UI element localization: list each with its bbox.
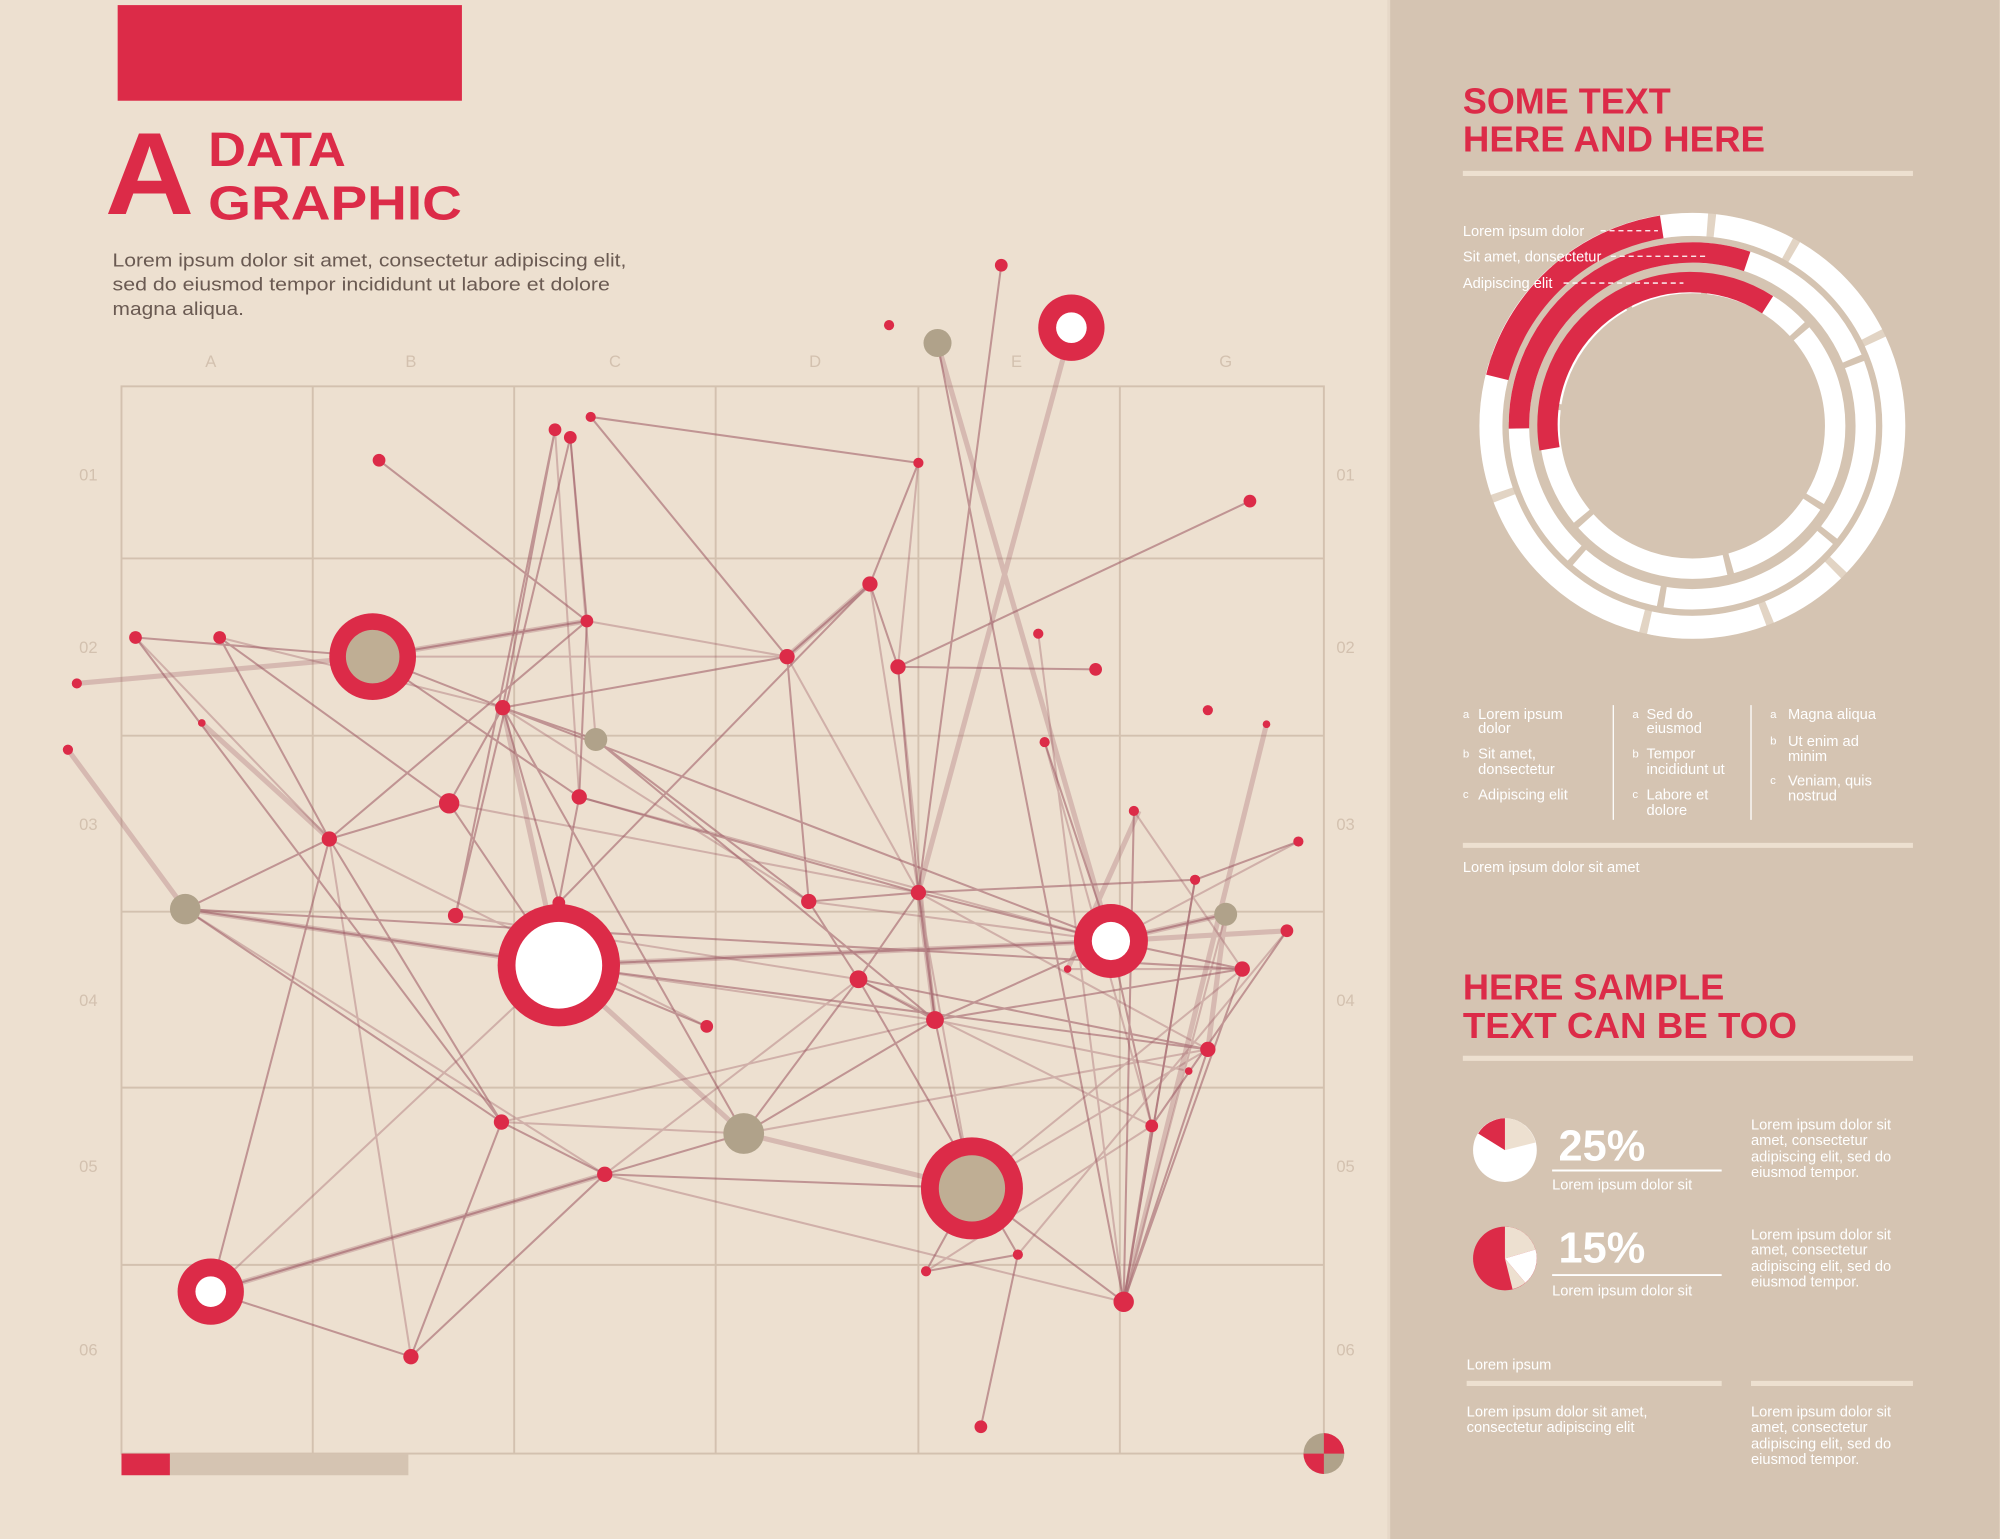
panel: right sidebar: Lorem ipsum dolor sit amet [1463, 860, 1640, 876]
footer notes: Lorem ipsum dolor sit [1751, 1405, 1891, 1421]
footer notes: amet, consectetur [1751, 1420, 1868, 1436]
heading: some text: SOME TEXT [1463, 81, 1671, 121]
legend columns: b [1463, 748, 1469, 760]
heading: sample text: HERE SAMPLE [1463, 968, 1724, 1008]
grid labels: 04 [79, 991, 98, 1010]
legend columns: a [1632, 709, 1639, 721]
legend columns: c [1632, 789, 1638, 801]
legend columns: Tempor [1646, 747, 1695, 763]
grid labels: 03 [79, 815, 98, 834]
grid labels: D [809, 352, 821, 371]
panel: right sidebar [1388, 0, 2000, 1539]
stat 15% [1552, 1224, 1722, 1299]
legend columns: Adipiscing elit [1478, 787, 1568, 803]
grid labels: 01 [79, 466, 98, 485]
donut labels: Lorem ipsum dolor [1463, 224, 1584, 240]
panel: right sidebar: adipiscing elit, sed do [1751, 1150, 1891, 1166]
grid labels: 06 [1336, 1340, 1355, 1359]
grid labels: 02 [1336, 638, 1355, 657]
stat 25% [1552, 1122, 1722, 1194]
heading: sample text: TEXT CAN BE TOO [1463, 1006, 1797, 1046]
grid labels: 05 [1336, 1157, 1355, 1176]
panel: right sidebar: Lorem ipsum dolor sit [1751, 1227, 1891, 1243]
grid labels: G [1219, 352, 1232, 371]
panel: right sidebar: amet, consectetur [1751, 1243, 1868, 1259]
grid labels: 05 [79, 1157, 98, 1176]
network edges [68, 265, 1298, 1427]
grid labels: 04 [1336, 991, 1355, 1010]
legend columns: minim [1788, 749, 1827, 765]
legend columns: Sit amet, [1478, 747, 1536, 763]
footer notes: adipiscing elit, sed do [1751, 1436, 1891, 1452]
stat 25%: 25% [1558, 1122, 1645, 1170]
legend columns: dolore [1646, 803, 1687, 819]
legend columns: Ut enim ad [1788, 734, 1859, 750]
legend columns: Sed do [1646, 707, 1693, 723]
pie 25% [1473, 1118, 1537, 1182]
footer notes [1467, 1357, 1891, 1468]
title block: GRAPHIC [208, 176, 462, 230]
stat 15%: Lorem ipsum dolor sit [1552, 1283, 1692, 1299]
heading: some text [1463, 81, 1765, 160]
intro text: sed do eiusmod tempor incididunt ut labore et dolore [113, 274, 610, 295]
footer notes: consectetur adipiscing elit [1467, 1420, 1635, 1436]
panel: right sidebar: eiusmod tempor. [1751, 1275, 1859, 1291]
legend columns: Lorem ipsum [1478, 707, 1563, 723]
title block: DATA [208, 123, 346, 177]
footer notes: Lorem ipsum [1467, 1357, 1551, 1373]
panel: right sidebar: adipiscing elit, sed do [1751, 1259, 1891, 1275]
intro text: Lorem ipsum dolor sit amet, consectetur adipiscing elit, [113, 249, 626, 270]
donut labels [1463, 224, 1601, 292]
grid labels: B [405, 352, 416, 371]
heading: sample text [1463, 968, 1797, 1046]
stat 25%: Lorem ipsum dolor sit [1552, 1178, 1692, 1194]
grid labels: 03 [1336, 815, 1355, 834]
pie 15% [1473, 1227, 1537, 1290]
legend columns: Magna aliqua [1788, 707, 1877, 723]
grid labels: C [609, 352, 621, 371]
title block: A [105, 108, 194, 239]
intro text [113, 249, 626, 319]
hub nodes [178, 295, 1148, 1325]
grid labels: A [205, 352, 217, 371]
footer notes: eiusmod tempor. [1751, 1452, 1859, 1468]
donut chart [1491, 224, 1894, 627]
intro text: magna aliqua. [113, 298, 244, 319]
legend columns: incididunt ut [1646, 762, 1725, 778]
title block [105, 5, 462, 239]
donut labels: Sit amet, donsectetur [1463, 249, 1601, 265]
legend columns: dolor [1478, 721, 1511, 737]
heading: some text: HERE AND HERE [1463, 120, 1765, 160]
legend columns: c [1770, 775, 1776, 787]
icon: corner pie [1303, 1433, 1344, 1474]
legend columns: Labore et [1646, 787, 1708, 803]
legend columns: c [1463, 789, 1469, 801]
legend columns: b [1632, 748, 1639, 760]
grid [121, 386, 1324, 1454]
legend columns: eiusmod [1646, 721, 1702, 737]
grid labels: 01 [1336, 466, 1355, 485]
panel: right sidebar: eiusmod tempor. [1751, 1165, 1859, 1181]
progress bar [121, 1454, 408, 1475]
grid labels: 02 [79, 638, 98, 657]
legend columns: b [1770, 736, 1777, 748]
panel: right sidebar: amet, consectetur [1751, 1133, 1868, 1149]
grid labels: E [1011, 352, 1022, 371]
grid labels [79, 352, 1355, 1359]
legend columns: Veniam, quis [1788, 773, 1872, 789]
donut labels: Adipiscing elit [1463, 276, 1552, 292]
footer notes: Lorem ipsum dolor sit amet, [1467, 1405, 1648, 1421]
network nodes [63, 259, 1303, 1433]
grid labels: 06 [79, 1340, 98, 1359]
legend columns: donsectetur [1478, 762, 1555, 778]
legend columns: a [1463, 709, 1470, 721]
panel: right sidebar: Lorem ipsum dolor sit [1751, 1118, 1891, 1134]
legend columns: nostrud [1788, 789, 1837, 805]
stat 15%: 15% [1558, 1224, 1645, 1272]
legend columns: a [1770, 709, 1777, 721]
legend columns [1463, 707, 1877, 819]
